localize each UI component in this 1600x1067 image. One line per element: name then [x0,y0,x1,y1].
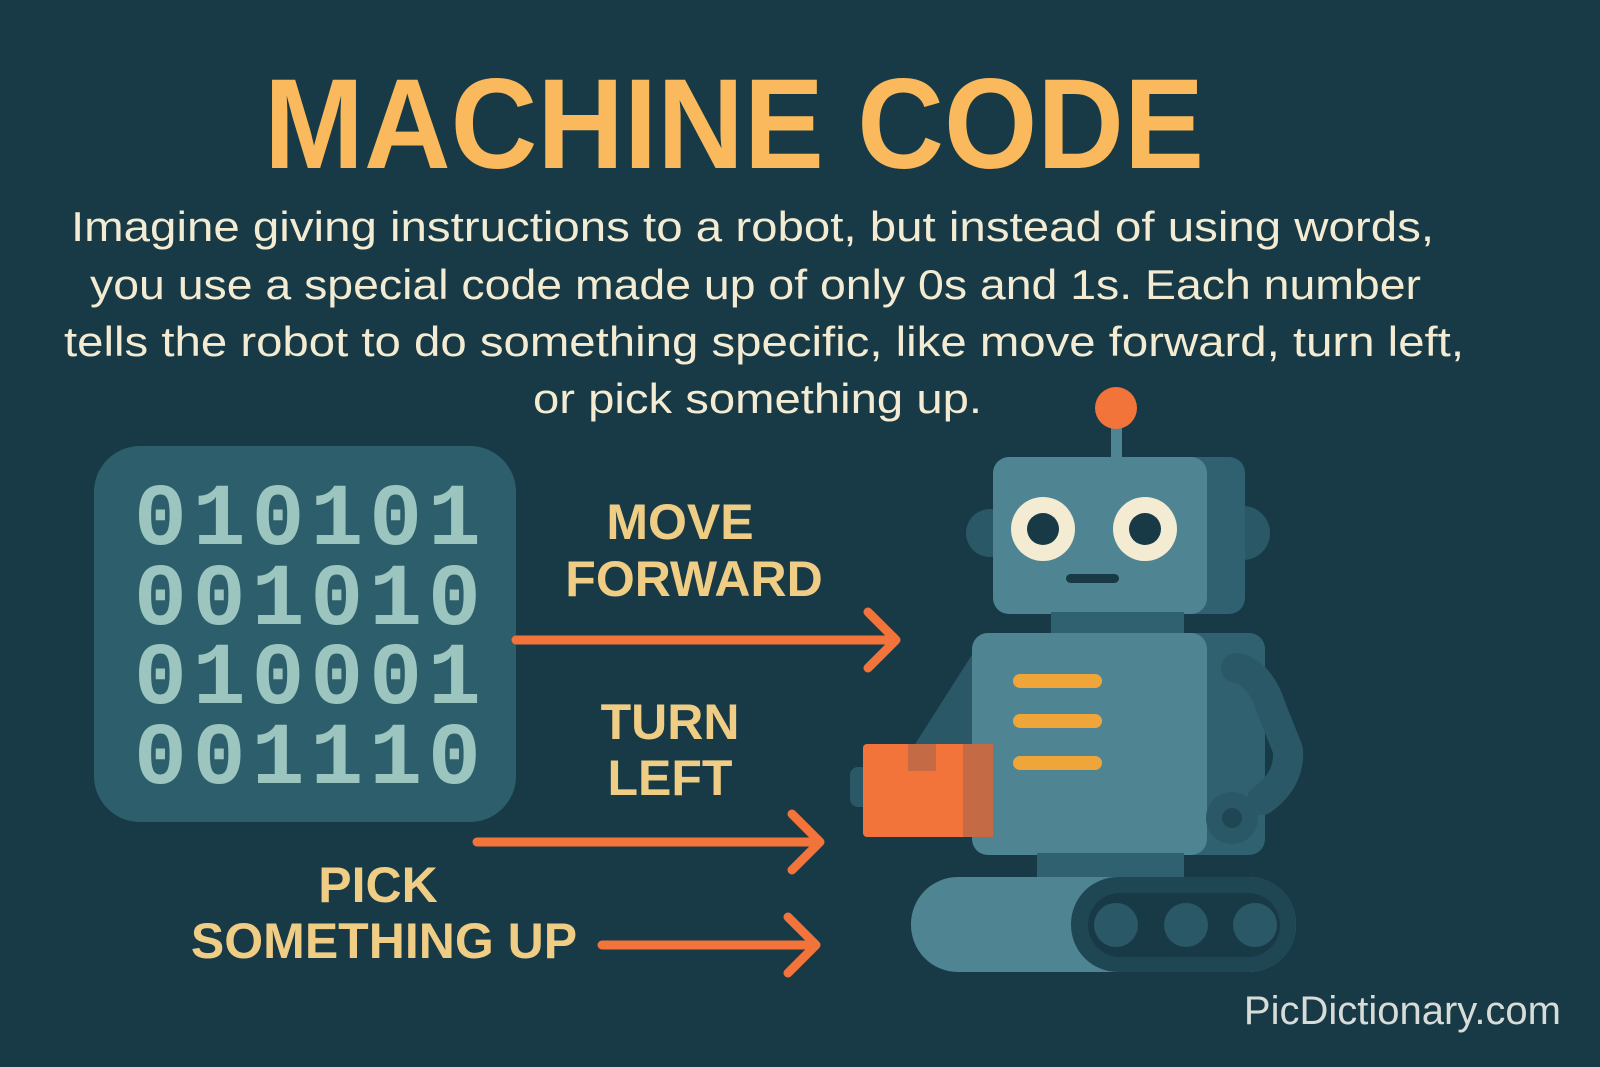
panel: binary code: 001010 [134,552,487,651]
intro paragraph: Imagine giving instructions to a robot, but instead of using words, [71,203,1434,250]
footer: site name: PicDictionary.com [1244,989,1561,1033]
panel: binary code: 010101 [134,472,487,571]
lower neck [1037,853,1184,879]
robot [850,387,1296,972]
label: turn left: LEFT [608,750,732,806]
body [972,633,1265,855]
arrow: pick something up [602,917,816,973]
intro paragraph: you use a special code made up of only 0s and 1s. Each number [90,261,1421,308]
label: pick something up [191,857,577,969]
label: move forward [565,494,823,607]
arrow: turn left [477,814,820,870]
head [993,457,1245,614]
intro paragraph: tells the robot to do something specific, like move forward, turn left, [64,318,1464,365]
hand left [850,767,886,807]
antenna [1095,387,1137,460]
panel: binary code: 010001 [134,631,487,730]
label: pick something up: SOMETHING UP [191,913,577,969]
box [863,744,993,837]
panel: binary code [94,446,516,822]
left arm [905,650,975,760]
intro paragraph: or pick something up. [533,375,982,422]
label: pick something up: PICK [318,857,438,913]
intro paragraph [64,203,1464,422]
label: move forward: FORWARD [565,551,823,607]
panel: binary code: 001110 [134,711,487,810]
title: MACHINE CODE [264,53,1204,196]
label: turn left: TURN [601,694,739,750]
right arm [1236,668,1288,800]
ears [966,506,1270,560]
base [911,877,1296,972]
arrow: move forward [516,612,896,668]
neck [1051,612,1184,636]
label: turn left [601,694,739,806]
label: move forward: MOVE [606,494,754,550]
right hand [1206,792,1258,844]
